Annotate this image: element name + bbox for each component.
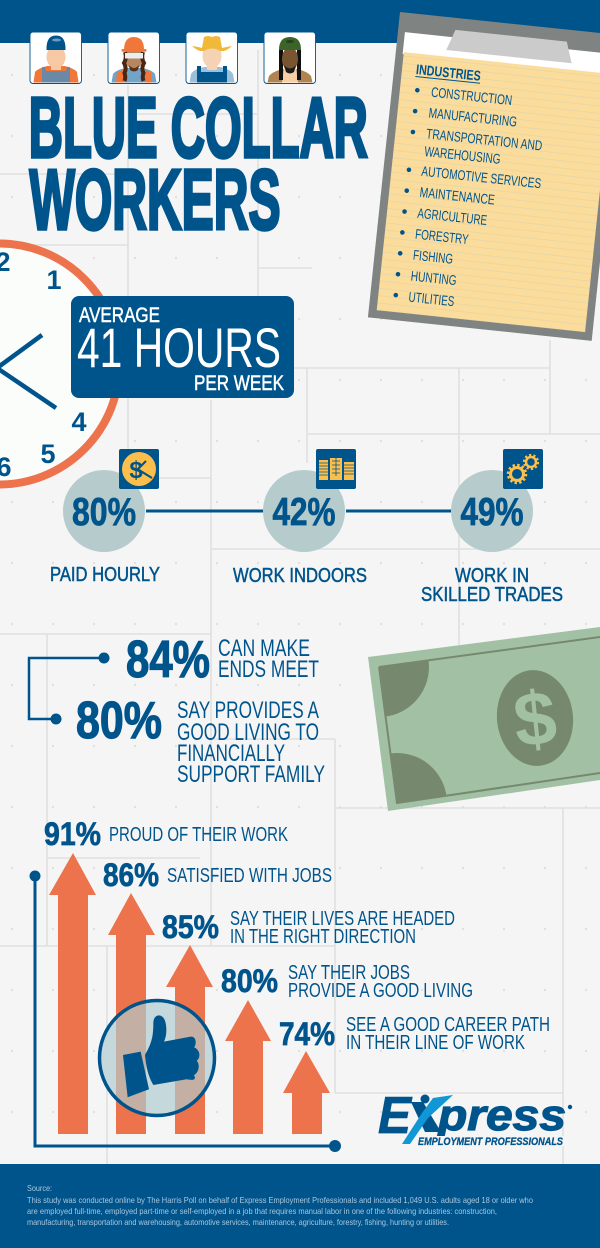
stat: satisfied with jobs [103, 857, 332, 893]
source text: manufacturing, transportation and warehousing, automotive services, maintenance, agriculture, forestry, fishing, hunting or utilities. [27, 1217, 449, 1227]
portrait: worker in blue cap [30, 32, 82, 84]
dollar bill [368, 627, 600, 811]
icon: gears [503, 449, 543, 489]
icon: buildings [316, 449, 356, 489]
header band [0, 0, 600, 43]
industries text list [392, 61, 553, 317]
industries text list: FORESTRY [414, 226, 470, 247]
stat: good living jobs: 80% [221, 963, 278, 999]
icon: thumbs up [98, 998, 216, 1118]
logo: Express Employment Professionals: E [378, 1087, 412, 1145]
average hours callout: 41 HOURS [77, 316, 281, 379]
stat: work indoors: WORK INDOORS [233, 565, 367, 587]
stat: good living: SAY PROVIDES A [177, 697, 319, 724]
industries text list: AGRICULTURE [417, 205, 488, 228]
stat: ends meet: CAN MAKE [218, 635, 310, 662]
stat: career path [279, 1014, 550, 1054]
clipboard clip [446, 29, 574, 63]
industries text list: WAREHOUSING [424, 143, 501, 167]
portrait: worker in green cap [264, 32, 316, 84]
worker portraits row [30, 32, 316, 84]
stat: career path: IN THEIR LINE OF WORK [346, 1032, 525, 1054]
stat: good living: GOOD LIVING TO [177, 719, 319, 746]
stat: paid hourly: 80% [72, 491, 136, 534]
stat: right direction: 85% [162, 909, 219, 945]
average hours callout: AVERAGE [79, 304, 160, 327]
arrow chart [49, 853, 330, 1134]
stat: good living: FINANCIALLY [177, 740, 285, 767]
stat: satisfied with jobs: 86% [103, 857, 159, 893]
stat: good living jobs: PROVIDE A GOOD LIVING [288, 980, 473, 1002]
stat: ends meet: 84% [126, 631, 210, 689]
industries text list: MANUFACTURING [428, 104, 518, 130]
stat: career path: 74% [279, 1016, 335, 1052]
industries text list: CONSTRUCTION [430, 84, 513, 108]
stat: good living jobs: SAY THEIR JOBS [288, 962, 410, 984]
stat: right direction: IN THE RIGHT DIRECTION [230, 926, 416, 948]
stat: right direction: SAY THEIR LIVES ARE HEADED [230, 908, 455, 930]
stat: paid hourly [50, 449, 160, 586]
average hours callout: PER WEEK [194, 372, 284, 395]
source text: are employed full-time, employed part-time or self-employed in a job that requires manual labor in one of the following industries: construction, [27, 1206, 497, 1216]
clock [0, 244, 120, 484]
connector line [146, 510, 451, 512]
stat: skilled trades: WORK IN [455, 565, 529, 587]
stat: proud of work: PROUD OF THEIR WORK [109, 824, 288, 846]
stat: good living: SUPPORT FAMILY [177, 761, 325, 788]
logo: Express Employment Professionals [378, 1087, 572, 1148]
chart axes [30, 870, 341, 1152]
logo: Express Employment Professionals: EMPLOYMENT PROFESSIONALS [418, 1136, 564, 1148]
industries text list: TRANSPORTATION AND [425, 125, 543, 153]
stat: proud of work: 91% [44, 816, 101, 852]
title: WORKERS [30, 153, 280, 248]
average hours callout [71, 296, 294, 398]
clock: 1 [46, 265, 62, 295]
clock: 4 [71, 407, 87, 437]
stat: skilled trades [421, 449, 563, 606]
stat: ends meet: ENDS MEET [218, 656, 319, 683]
title [29, 81, 368, 248]
stat: ends meet [126, 631, 319, 689]
bracket connector [29, 652, 110, 724]
stat: skilled trades: SKILLED TRADES [421, 584, 563, 606]
industries text list: HUNTING [410, 268, 457, 288]
portrait: worker in orange hard hat [108, 32, 160, 84]
industries text list: AUTOMOTIVE SERVICES [421, 163, 542, 191]
industries text list: INDUSTRIES [415, 61, 482, 84]
stat: proud of work [44, 816, 288, 852]
stat: good living [76, 692, 325, 788]
industries text list: UTILITIES [408, 289, 455, 309]
source text: This study was conducted online by The Harris Poll on behalf of Express Employment Professionals and included 1,049 U.S. adults aged 18 or older who [27, 1195, 533, 1205]
clock: 5 [40, 439, 56, 469]
clipboard: industries list [368, 12, 600, 341]
source text [27, 1183, 533, 1227]
source text: Source: [27, 1183, 52, 1193]
stat: work indoors: 42% [272, 491, 336, 534]
portrait: worker in straw hat [186, 32, 238, 84]
dollar bill: $ [510, 675, 561, 764]
stat: work indoors [233, 449, 367, 587]
stat: skilled trades: 49% [460, 491, 524, 534]
stat: satisfied with jobs: SATISFIED WITH JOBS [167, 865, 332, 887]
industries text list: MAINTENANCE [419, 184, 496, 208]
stat: paid hourly: PAID HOURLY [50, 564, 160, 586]
footer band [0, 1164, 600, 1248]
logo: Express Employment Professionals: press [437, 1091, 566, 1140]
stat: right direction [162, 908, 455, 948]
industries text list: FISHING [412, 247, 454, 267]
stat: good living: 80% [76, 692, 162, 750]
stat: good living jobs [221, 962, 473, 1002]
icon: dollar clock: $ [129, 457, 143, 484]
